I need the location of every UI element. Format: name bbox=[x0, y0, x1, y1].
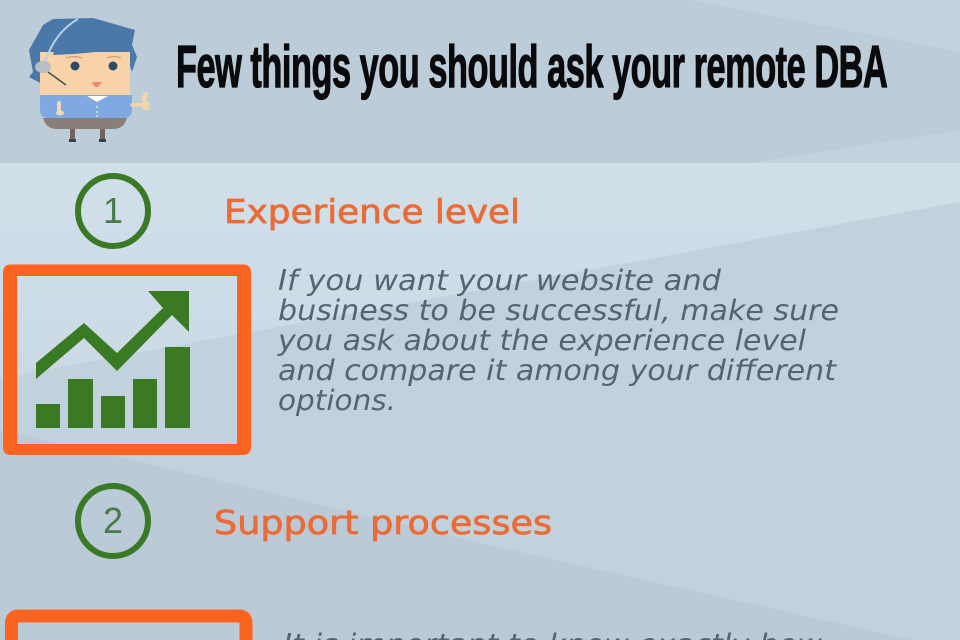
number badge 2 bbox=[78, 486, 148, 556]
heading: Support processes: Support processes bbox=[214, 503, 552, 542]
icon: orange frame, second item (cropped) bbox=[12, 616, 246, 640]
icon: DBA support mascot with headset bbox=[29, 18, 147, 142]
number badge 2: 2 bbox=[103, 500, 123, 541]
text block: experience level description: If you want your website and bbox=[278, 264, 722, 297]
number badge 1: 1 bbox=[103, 190, 123, 231]
text block: experience level description: options. bbox=[278, 384, 396, 417]
title: Few things you should ask your remote DBA bbox=[176, 34, 888, 100]
number badge 1 bbox=[78, 176, 148, 246]
text block: experience level description: business to be successful, make sure bbox=[278, 294, 839, 327]
icon: growth chart in orange frame bbox=[3, 264, 251, 455]
text block: experience level description bbox=[277, 264, 839, 417]
text block: experience level description: you ask about the experience level bbox=[277, 324, 806, 357]
heading: Experience level: Experience level bbox=[224, 192, 520, 231]
text block: experience level description: and compare it among your different bbox=[278, 354, 838, 387]
